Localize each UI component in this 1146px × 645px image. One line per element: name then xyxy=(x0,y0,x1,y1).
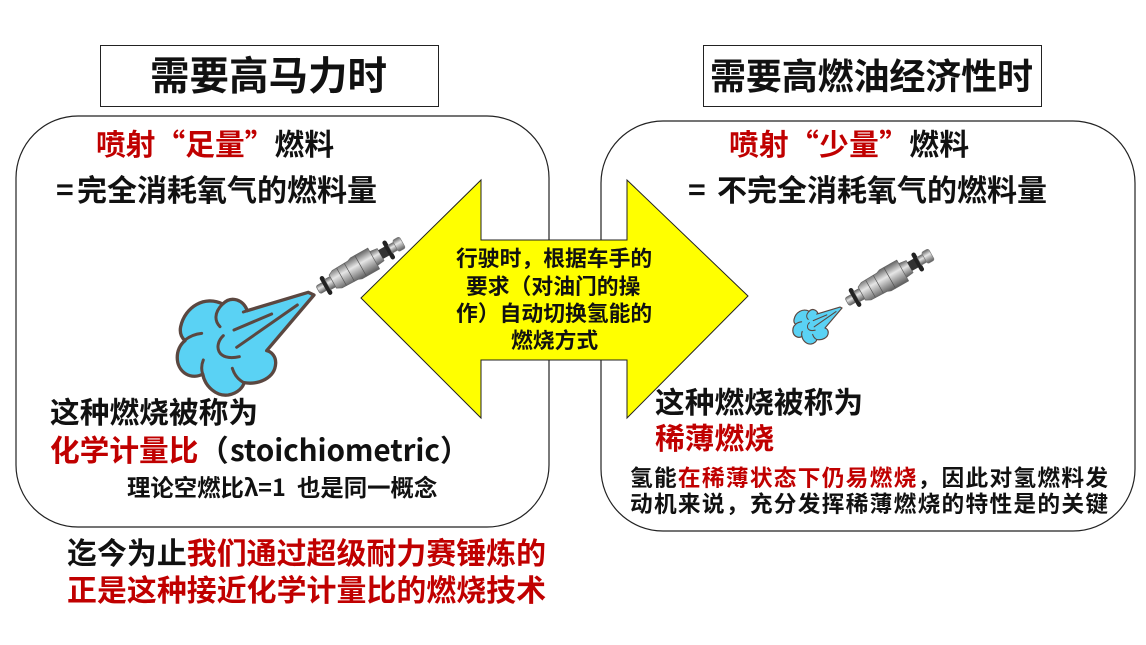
heading: high power: 需要高马力时 xyxy=(150,45,387,102)
text: lambda note: 也是同一概念 xyxy=(297,469,437,503)
text: stoichiometric label: 化学计量比 xyxy=(50,427,198,470)
text: lean burn label: 这种燃烧被称为 xyxy=(655,379,863,422)
text: arrow caption: 要求（对油门的操 xyxy=(466,270,641,301)
panel: high power xyxy=(16,116,549,527)
text: endurance racing conclusion xyxy=(67,529,546,610)
text: complete oxygen consumption: = xyxy=(56,166,74,210)
text: lean burn explanation: 氢能在稀薄状态下仍易燃烧，因此对氢燃料发 xyxy=(630,460,1108,493)
text: lambda note: 理论空燃比λ=1 xyxy=(127,469,286,503)
text: stoichiometric label xyxy=(50,389,470,470)
text: stoichiometric label: stoichiometric xyxy=(230,427,440,470)
text: incomplete oxygen consumption: 不完全消耗氧气的燃料量 xyxy=(717,166,1047,210)
text: complete oxygen consumption: 完全消耗氧气的燃料量 xyxy=(77,166,377,210)
text: arrow caption: 行驶时，根据车手的 xyxy=(456,242,652,273)
panel: fuel economy xyxy=(601,121,1135,531)
text: arrow caption: 作）自动切换氢能的 xyxy=(456,297,652,328)
text: small injection: 喷射“少量”燃料 xyxy=(729,121,969,164)
text: lean burn explanation xyxy=(630,460,1108,519)
text: stoichiometric label: 这种燃烧被称为 xyxy=(50,389,258,432)
text: sufficient injection: 喷射“足量”燃料 xyxy=(96,121,334,164)
icon: small fuel spray xyxy=(793,244,937,344)
text: stoichiometric label: （ xyxy=(199,427,229,470)
icon: large fuel spray xyxy=(177,232,408,395)
text: lean burn explanation: 动机来说，充分发挥稀薄燃烧的特性是的关键 xyxy=(630,486,1108,519)
text: stoichiometric label: ） xyxy=(440,427,470,470)
text: lean burn label: 稀薄燃烧 xyxy=(655,415,774,458)
text: endurance racing conclusion: 迄今为止我们通过超级耐力赛锤炼的 xyxy=(67,529,546,573)
text: lean burn label xyxy=(655,379,863,458)
text: endurance racing conclusion: 正是这种接近化学计量比的燃烧技术 xyxy=(67,566,546,610)
heading: fuel economy: 需要高燃油经济性时 xyxy=(710,48,1033,100)
arrow: double-headed switch xyxy=(361,180,748,418)
text: arrow caption: 燃烧方式 xyxy=(511,324,598,355)
heading: high power xyxy=(100,45,438,106)
text: incomplete oxygen consumption: = xyxy=(688,166,706,210)
